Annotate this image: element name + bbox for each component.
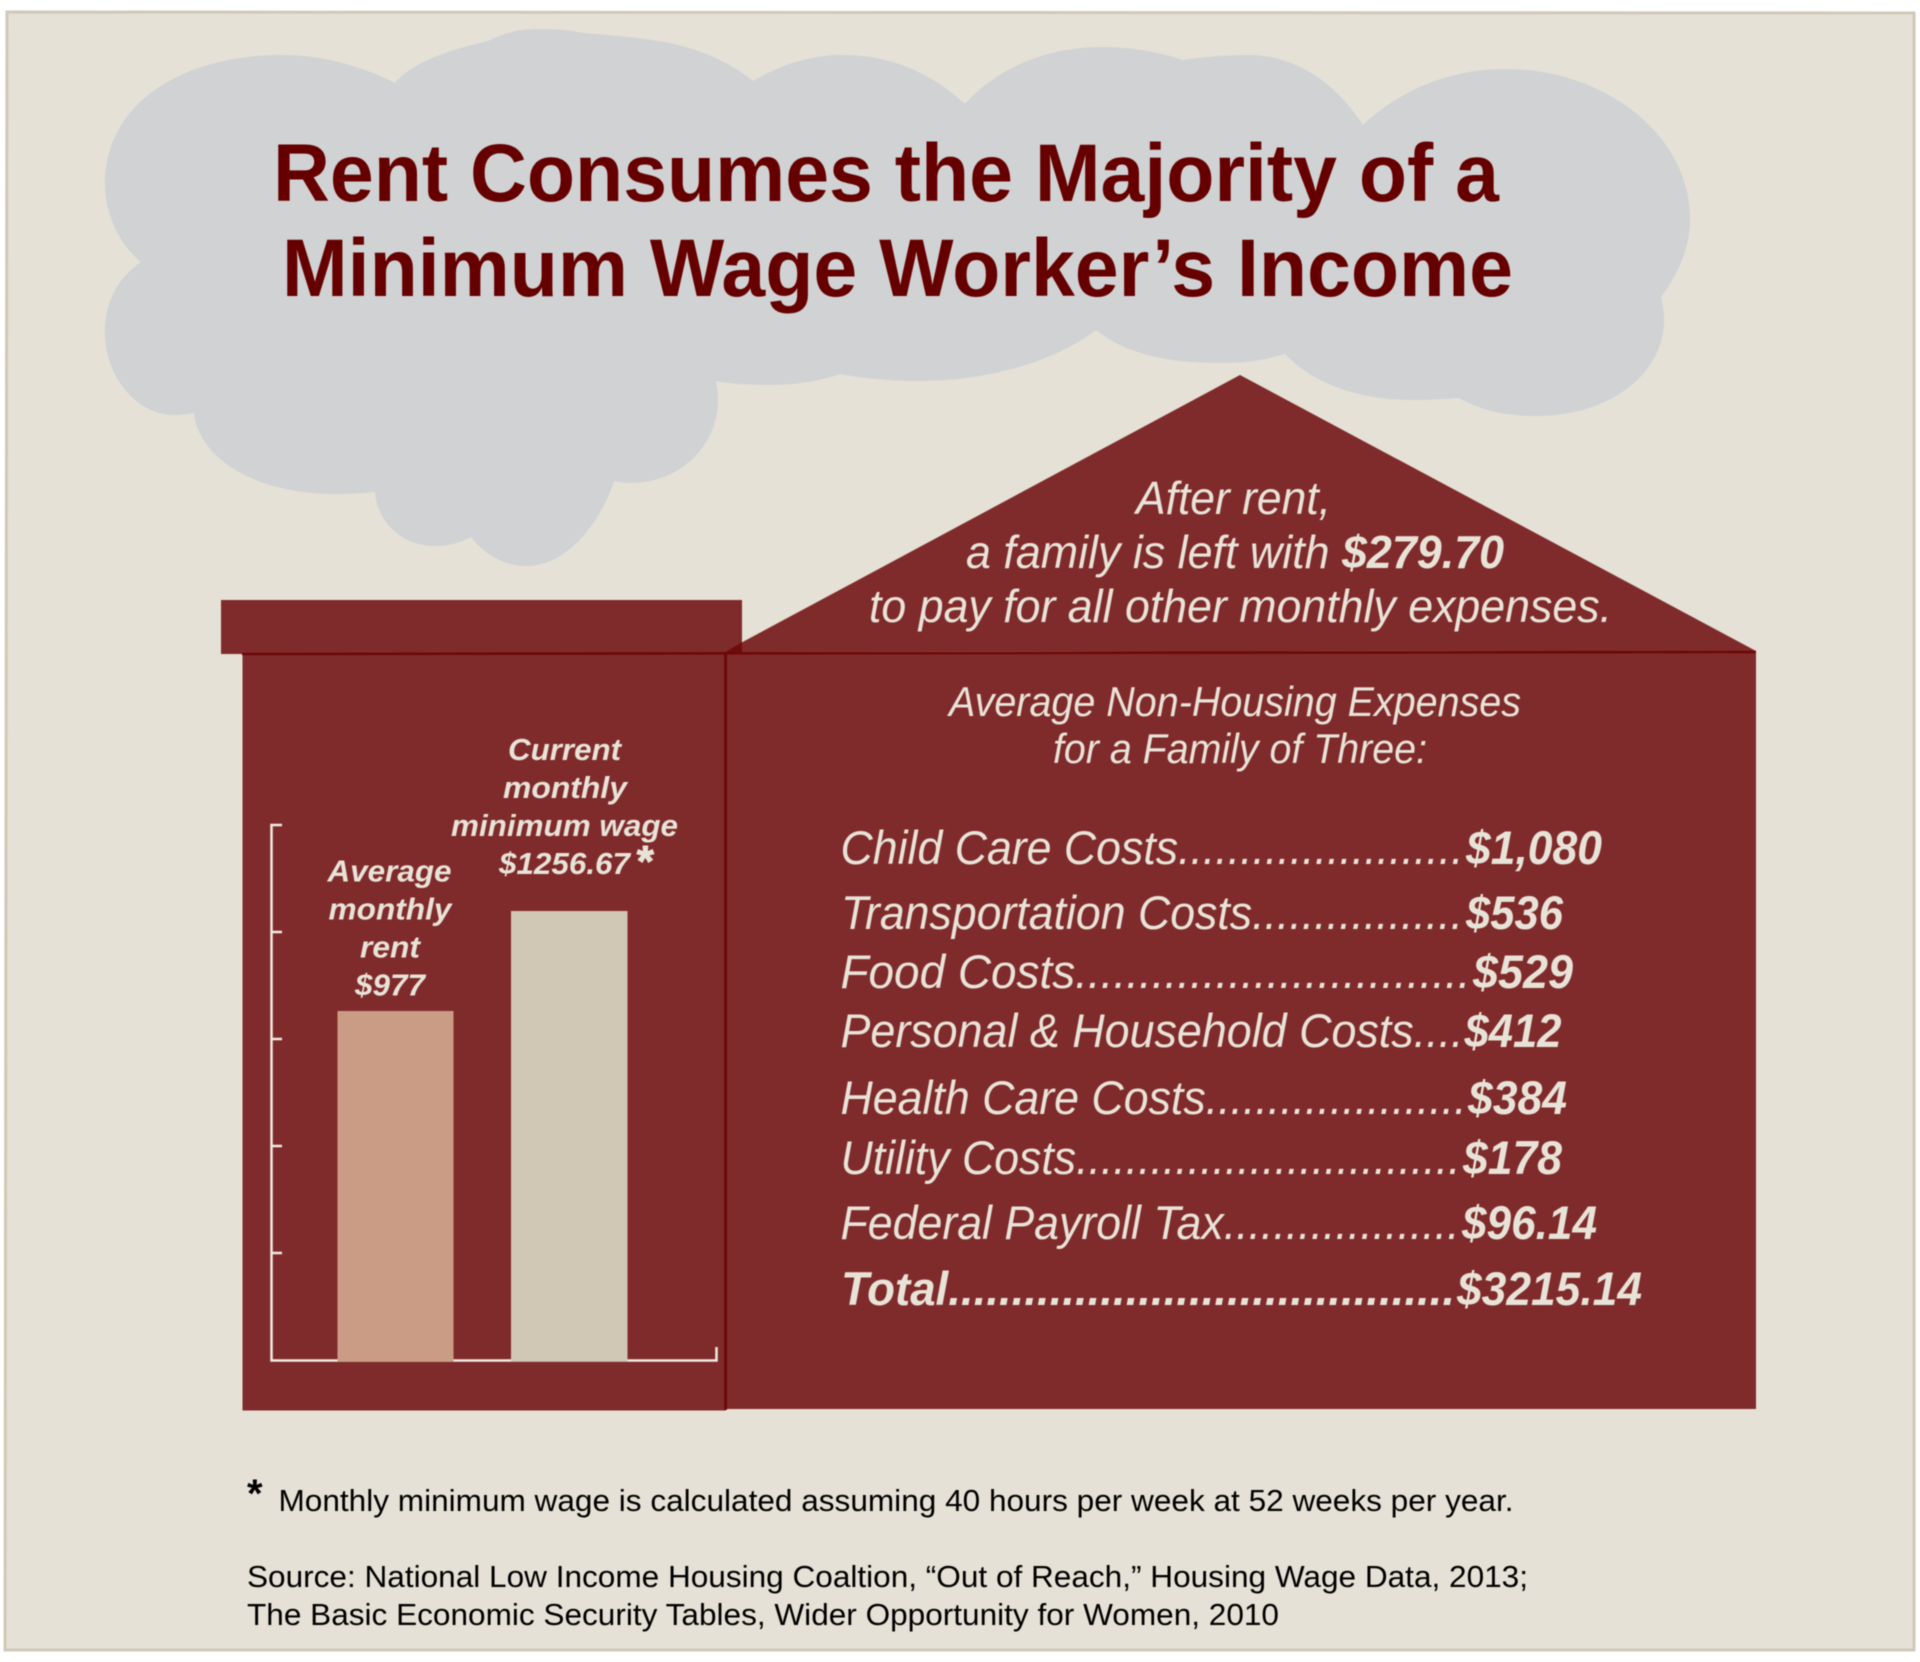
roof message: a family is left with $279.70 (966, 526, 1504, 578)
label: average monthly rent: $977 (354, 968, 427, 1002)
row: health care: $384 (1467, 1071, 1567, 1124)
smoke cloud (105, 29, 1690, 566)
row: personal and household: Personal & Household Costs.... (840, 1004, 1464, 1057)
title: Rent Consumes the Majority of a (273, 128, 1500, 219)
label: average monthly rent: monthly (328, 892, 453, 926)
chart axes (272, 825, 716, 1360)
title: Minimum Wage Worker’s Income (282, 223, 1513, 314)
footnote: * (247, 1472, 263, 1516)
row: utility: $178 (1462, 1131, 1563, 1184)
title (273, 128, 1513, 314)
row: total: $3215.14 (1456, 1262, 1642, 1315)
house with roof (242, 375, 1756, 1410)
row: total: Total........................................ (841, 1262, 1455, 1315)
roof message (869, 472, 1612, 632)
label: current monthly minimum wage (451, 732, 678, 886)
bar chart: rent versus minimum wage (272, 732, 716, 1362)
row: child care: Child Care Costs....................... (840, 821, 1464, 874)
expenses heading: Average Non-Housing Expenses (946, 678, 1521, 725)
bar: current monthly minimum wage (511, 911, 628, 1362)
source: Source: National Low Income Housing Coaltion, “Out of Reach,” Housing Wage Data, 2013; (247, 1559, 1528, 1594)
label: current monthly minimum wage: monthly (503, 770, 629, 805)
label: current monthly minimum wage: minimum wage (451, 808, 678, 843)
row: transportation: Transportation Costs................. (841, 886, 1463, 939)
row: health care: Health Care Costs..................... (840, 1071, 1466, 1124)
source: The Basic Economic Security Tables, Wider Opportunity for Women, 2010 (247, 1597, 1279, 1632)
label: current monthly minimum wage: Current (508, 732, 623, 767)
chimney: rent building (221, 600, 742, 1410)
label: average monthly rent: Average (326, 854, 452, 888)
row: personal and household: $412 (1464, 1004, 1562, 1057)
row: transportation: $536 (1465, 886, 1564, 939)
expenses heading: for a Family of Three: (1053, 725, 1427, 772)
label: current monthly minimum wage: $1256.67 (498, 846, 632, 881)
row: child care: $1,080 (1465, 821, 1602, 874)
roof message: to pay for all other monthly expenses. (869, 580, 1612, 632)
expenses heading (946, 678, 1521, 772)
roof message: After rent, (1133, 472, 1331, 524)
label: average monthly rent (326, 854, 453, 1002)
footnote: Monthly minimum wage is calculated assuming 40 hours per week at 52 weeks per year. (278, 1483, 1514, 1518)
bar: average monthly rent (338, 1011, 454, 1362)
row: food: Food Costs............................... (840, 945, 1470, 998)
source (247, 1559, 1528, 1632)
row: federal payroll tax: Federal Payroll Tax................... (840, 1196, 1460, 1249)
row: food: $529 (1472, 945, 1573, 998)
label: current monthly minimum wage: * (635, 837, 654, 886)
label: average monthly rent: rent (360, 930, 422, 964)
expense list (840, 821, 1642, 1315)
row: federal payroll tax: $96.14 (1461, 1196, 1597, 1249)
row: utility: Utility Costs............................... (840, 1131, 1460, 1184)
